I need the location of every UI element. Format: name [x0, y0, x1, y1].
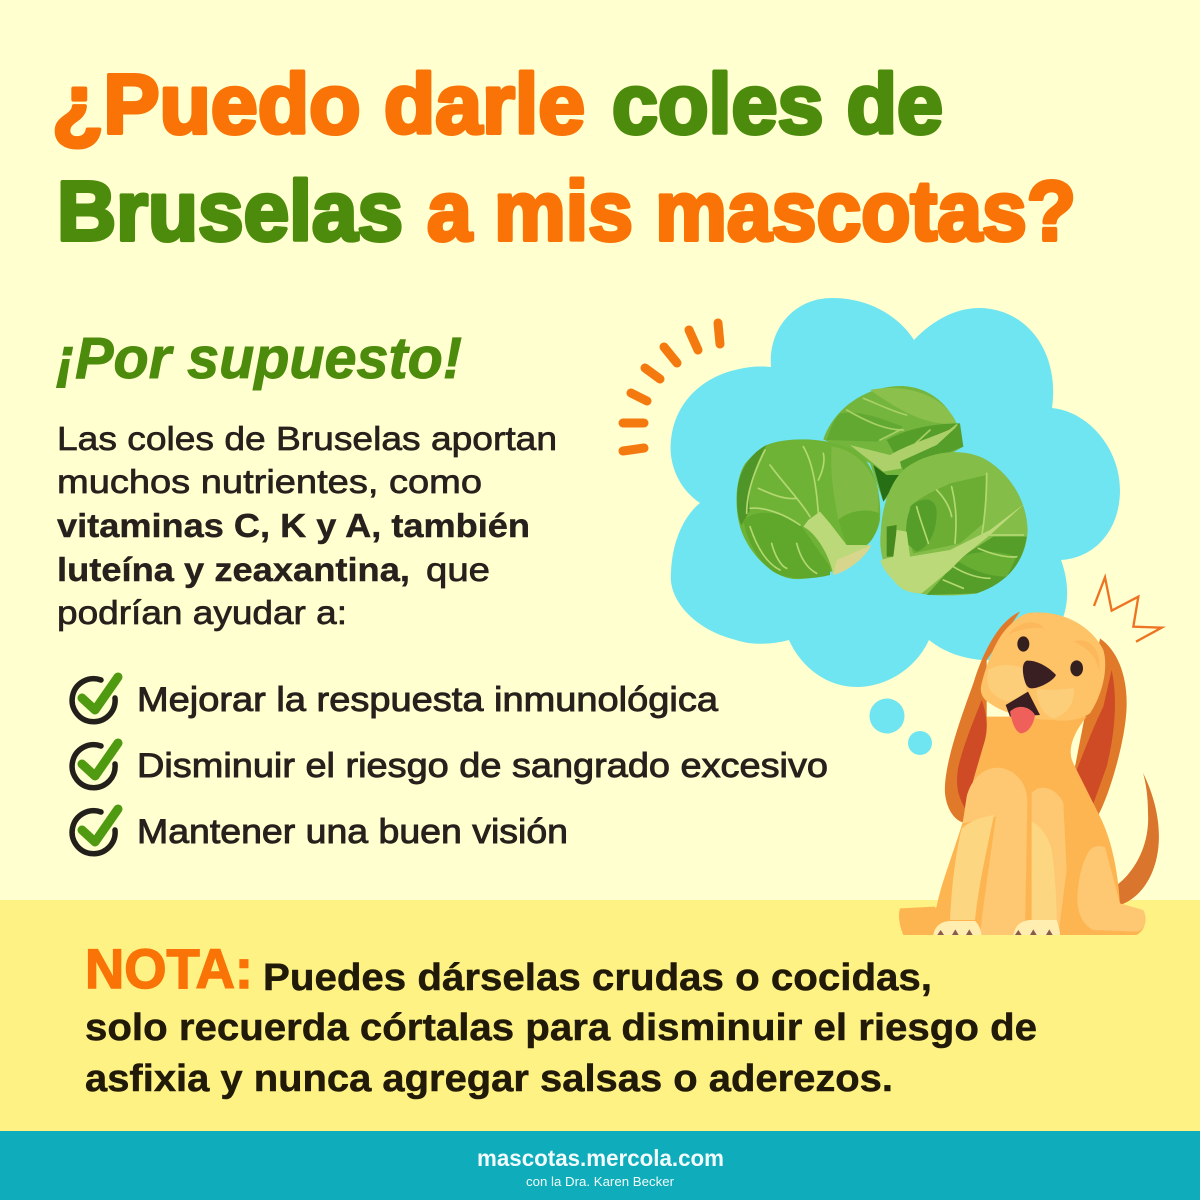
- icon: check 3: [72, 809, 118, 854]
- dog front leg: right: [1032, 788, 1067, 935]
- intro paragraph: vitaminas C, K y A, también: [57, 507, 530, 544]
- intro paragraph: podrían ayudar a:: [57, 594, 347, 631]
- note label: NOTA:: [85, 937, 253, 1000]
- benefit 1: Mejorar la respuesta inmunológica: [137, 681, 718, 719]
- brussels sprouts illustration: [737, 386, 1028, 595]
- dog tail: [1117, 773, 1159, 905]
- dog mouth: [1006, 692, 1040, 733]
- intro paragraph: Las coles de Bruselas aportan: [57, 420, 557, 457]
- benefits list: [72, 677, 828, 854]
- note: [85, 937, 1037, 1100]
- icon: orange burst lines: [623, 323, 720, 451]
- dog illustration: [899, 577, 1162, 935]
- sprout: right: [880, 452, 1028, 595]
- dog upper parts: [903, 577, 1162, 935]
- footer text: [477, 1145, 724, 1189]
- dog front leg: left: [950, 768, 1027, 935]
- sprout: left: [737, 439, 880, 579]
- dog nose: [1023, 661, 1056, 688]
- dog lower parts: [899, 768, 1146, 935]
- note text: asfixia y nunca agregar salsas o aderezos.: [85, 1058, 893, 1100]
- title: [52, 57, 1076, 258]
- title: Bruselas: [57, 164, 403, 258]
- benefit 2: Disminuir el riesgo de sangrado excesivo: [137, 747, 828, 785]
- note text: Puedes dárselas crudas o cocidas,: [263, 957, 932, 999]
- benefit 3: Mantener una buen visión: [137, 813, 568, 851]
- title: coles de: [612, 57, 943, 151]
- subheading: ¡Por supuesto!: [56, 326, 462, 391]
- intro paragraph: muchos nutrientes, como: [57, 463, 482, 500]
- dog neck and torso: [903, 717, 1145, 935]
- footer text: mascotas.mercola.com: [477, 1145, 724, 1171]
- thought bubble: large: [870, 698, 904, 734]
- note band background: [0, 900, 1200, 1131]
- dog hip: [1077, 846, 1146, 932]
- dog eyes: [1017, 636, 1083, 676]
- title: a mis mascotas?: [427, 164, 1076, 258]
- footer text: con la Dra. Karen Becker: [526, 1175, 674, 1189]
- dog ear: right: [1075, 638, 1127, 815]
- intro paragraph: [57, 420, 557, 631]
- title: ¿Puedo darle: [52, 57, 585, 151]
- note text: [85, 957, 1037, 1100]
- dog back foot: [899, 907, 935, 935]
- intro paragraph: luteína y zeaxantina,: [57, 551, 410, 588]
- sprout: top: [823, 386, 963, 502]
- footer band background: [0, 1131, 1200, 1200]
- intro paragraph: que: [426, 551, 490, 588]
- icon: check 1: [72, 677, 118, 722]
- note text: solo recuerda córtalas para disminuir el riesgo de: [85, 1007, 1037, 1049]
- icon: check 2: [72, 743, 118, 788]
- dog paws: [933, 920, 1060, 935]
- thought bubble: small: [908, 731, 932, 755]
- thought cloud: [671, 298, 1120, 687]
- dog ear: left: [945, 612, 1020, 822]
- icon: surprise zigzag: [1094, 577, 1162, 642]
- dog head: [981, 612, 1105, 721]
